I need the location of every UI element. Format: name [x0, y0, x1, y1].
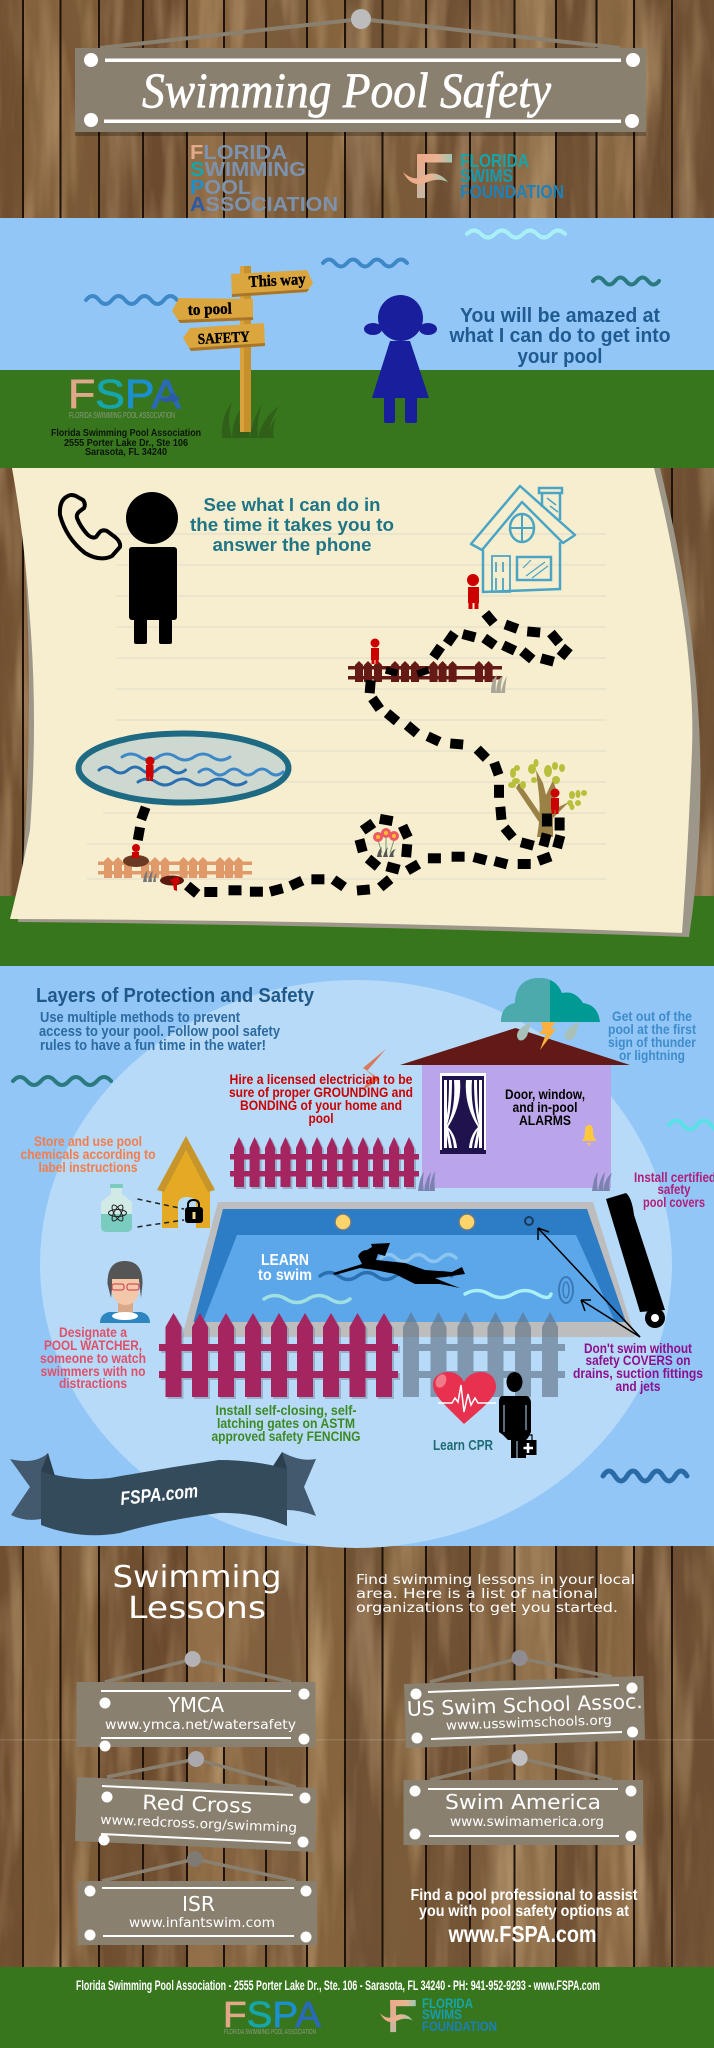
sign: US Swim School Assoc.: US Swim School Assoc. — [406, 1689, 643, 1721]
footer foundation logo: FLORIDA — [422, 1995, 473, 2011]
heading: swimming lessons — [112, 1560, 282, 1626]
logo: FSPA with address: FSPA — [68, 371, 182, 417]
text: chemicals — [20, 1134, 156, 1175]
logo: Florida Swimming Pool Association: POOL — [190, 177, 251, 199]
icon: bell — [582, 1125, 597, 1146]
drain — [525, 1217, 533, 1225]
sign: Red Cross — [75, 1751, 316, 1852]
title: Swimming Pool Safety — [142, 62, 552, 118]
sign: Swim America: Swim America — [445, 1790, 601, 1814]
footer FSPA logo: FSPA — [223, 1994, 321, 2035]
text: electrician: pool — [308, 1111, 334, 1126]
sign: to pool — [172, 298, 253, 323]
icon: electric bolt — [360, 1049, 386, 1092]
text: pool watcher: distractions — [59, 1376, 127, 1391]
icon: person on phone — [126, 492, 178, 644]
text: find a pool professional: Find a pool professional to assist — [410, 1887, 638, 1904]
text: electrician: sure of proper GROUNDING and — [229, 1085, 413, 1100]
text: learn to swim: LEARN — [261, 1252, 309, 1269]
text: lightning: or lightning — [619, 1048, 685, 1063]
footer foundation logo: SWIMS — [422, 2006, 462, 2022]
text: learn CPR: Learn CPR — [433, 1438, 493, 1454]
icon: swimmer — [333, 1243, 465, 1288]
text: lightning: sign of thunder — [608, 1035, 697, 1050]
icon: hole under fence — [123, 855, 149, 867]
text: fencing: latching gates on ASTM — [217, 1416, 355, 1431]
icon: dark fence — [348, 661, 502, 682]
logo: FSPA with address: FLORIDA SWIMMING POOL ASSOCIATION — [69, 411, 175, 420]
text: find a pool professional: you with pool safety options at — [419, 1903, 630, 1920]
logo: Florida Swimming Pool Association: ASSOCIATION — [190, 194, 338, 216]
sign: safety: SAFETY — [197, 329, 250, 348]
intro text — [39, 1010, 280, 1054]
text: pool cover warning — [573, 1341, 703, 1394]
icon: signpost — [172, 266, 313, 438]
text: find lessons — [356, 1573, 635, 1616]
text: electrician — [229, 1072, 413, 1126]
text: see what I can do: the time it takes you to — [190, 515, 394, 535]
panel: footer — [0, 1967, 714, 2048]
icon: drops and lightning — [517, 1022, 579, 1050]
logo: Florida Swims Foundation: SWIMS — [460, 166, 513, 186]
sign: US Swim School Assoc. — [404, 1650, 645, 1748]
text: find lessons: organizations to get you started. — [356, 1601, 618, 1616]
logo: Florida Swims Foundation: FLORIDA — [460, 151, 529, 171]
icon: fallen figure — [160, 876, 184, 891]
grass tufts — [418, 1171, 435, 1191]
text: pool cover warning: drains, suction fittings — [573, 1366, 703, 1381]
panel: layers of protection — [0, 966, 714, 1546]
text: amazed: You will be amazed at — [460, 305, 660, 327]
text: lightning: pool at the first — [608, 1022, 696, 1037]
intro text: Use multiple methods to prevent — [40, 1010, 240, 1026]
banner — [10, 1452, 316, 1535]
address: Sarasota, FL 34240 — [85, 447, 167, 458]
text: see what I can do: See what I can do in — [204, 495, 380, 515]
text: pool watcher — [40, 1325, 146, 1391]
text: alarms: ALARMS — [519, 1113, 571, 1128]
text: learn to swim: to swim — [258, 1267, 312, 1284]
green band below wood — [0, 896, 714, 966]
heading: swimming lessons: Lessons — [128, 1591, 266, 1626]
sign: safety — [183, 323, 265, 351]
icon: locked shed — [157, 1136, 215, 1228]
waves: section — [13, 1077, 714, 1481]
intro text: rules to have a fun time in the water! — [40, 1038, 266, 1054]
icon: light fence — [98, 857, 252, 878]
text: pool watcher: POOL WATCHER, — [44, 1338, 142, 1353]
text: alarms — [505, 1087, 585, 1128]
address: 2555 Porter Lake Dr., Ste 106 — [64, 438, 188, 449]
text: find lessons: area. Here is a list of national — [356, 1587, 598, 1602]
text: amazed: what I can do to get into — [449, 325, 670, 347]
banner text: FSPA.com — [119, 1481, 199, 1510]
text: learn to swim — [258, 1252, 312, 1284]
icon: flowers — [373, 828, 399, 857]
sign: YMCA: www.ymca.net/watersafety — [105, 1718, 296, 1733]
text: pool cover warning: safety COVERS on — [586, 1353, 690, 1368]
sign: ISR — [78, 1851, 317, 1945]
icon: padlock — [185, 1200, 203, 1223]
text: alarms: and in-pool — [512, 1100, 578, 1115]
intro text: access to your pool. Follow pool safety — [39, 1024, 280, 1040]
address — [51, 428, 201, 458]
sign: YMCA: YMCA — [167, 1693, 224, 1717]
text: electrician: BONDING of your home and — [240, 1098, 402, 1113]
icon: gray grass — [491, 675, 507, 693]
icon: pool cover roll — [606, 1193, 665, 1328]
icon: front fence — [159, 1313, 400, 1399]
text: alarms: Door, window, — [505, 1087, 585, 1102]
waves: sky — [86, 230, 659, 304]
text: see what I can do — [190, 495, 394, 555]
logo: Florida Swimming Pool Association: FLORIDA — [190, 142, 287, 164]
text: find a pool professional — [410, 1887, 638, 1947]
arrows to drains — [538, 1228, 640, 1337]
sign: Red Cross: www.redcross.org/swimming — [100, 1813, 297, 1836]
panel: house — [400, 1022, 630, 1191]
icon: storm cloud — [501, 978, 600, 1022]
icon: small gray grass — [143, 870, 157, 882]
text: chemicals: Store and use pool — [34, 1134, 142, 1149]
sign: this way: This way — [248, 271, 306, 291]
text: pool covers — [634, 1170, 714, 1210]
sign: to pool: to pool — [188, 300, 233, 319]
icon: gray gate fence — [403, 1312, 565, 1397]
text: lightning: Get out of the — [612, 1009, 692, 1024]
path: dashed route — [133, 610, 573, 898]
text: pool cover warning: and jets — [616, 1379, 660, 1394]
text: find lessons: Find swimming lessons in your local — [356, 1573, 635, 1588]
footer foundation logo: FOUNDATION — [422, 2018, 497, 2034]
website: www.FSPA.com — [448, 1921, 596, 1947]
text: electrician: Hire a licensed electrician to be — [230, 1072, 413, 1087]
pool waves — [264, 1254, 551, 1302]
logo: Florida Swimming Pool Association: SWIMMING — [190, 159, 306, 181]
grass tuft — [222, 403, 279, 438]
address: Florida Swimming Pool Association — [51, 428, 201, 439]
icon: chemical bottle — [101, 1184, 132, 1232]
logo: FSPA with address — [51, 371, 201, 458]
ruled lines — [87, 534, 606, 879]
heading: Layers of Protection and Safety — [36, 985, 315, 1007]
text: pool covers: safety — [658, 1182, 691, 1197]
text: amazed: your pool — [518, 346, 602, 368]
text: pool cover warning: Don't swim without — [584, 1341, 692, 1356]
sign: Swim America — [404, 1750, 643, 1845]
icon: pool watcher woman — [100, 1261, 150, 1323]
logo: Florida Swimming Pool Association — [190, 142, 338, 216]
sign: ISR: www.infantswim.com — [129, 1916, 275, 1931]
icon: phone — [60, 495, 120, 558]
icon: swimming pool — [182, 1202, 635, 1337]
sign: YMCA — [76, 1651, 316, 1752]
text: chemicals: chemicals according to — [20, 1147, 156, 1162]
logo: Florida Swims Foundation: FOUNDATION — [460, 182, 564, 202]
text: pool watcher: someone to watch — [40, 1351, 146, 1366]
icon: pool pond — [78, 734, 288, 802]
sign: US Swim School Assoc.: www.usswimschools.org — [446, 1713, 612, 1734]
icon: girl — [364, 295, 437, 423]
logo: Florida Swims Foundation — [403, 151, 564, 202]
sign: this way — [231, 270, 313, 297]
icon: sketched house — [471, 486, 575, 592]
text: pool watcher: swimmers with no — [40, 1364, 146, 1379]
icons: red child figures — [132, 574, 560, 858]
text: see what I can do: answer the phone — [212, 535, 372, 555]
sign: Swim America: www.swimamerica.org — [450, 1815, 604, 1830]
first aid kit — [520, 1435, 536, 1455]
large light circle — [40, 980, 672, 1548]
icon: window — [440, 1073, 486, 1154]
text: amazed — [449, 305, 670, 368]
panel: paper — [10, 468, 700, 937]
pool lights — [335, 1214, 351, 1230]
sign: Red Cross: Red Cross — [142, 1790, 253, 1818]
text: fencing: Install self-closing, self- — [216, 1403, 356, 1418]
text: fencing: approved safety FENCING — [212, 1429, 360, 1444]
sign: ISR: ISR — [182, 1892, 215, 1916]
text: lightning — [608, 1009, 697, 1063]
footer foundation logo — [380, 1995, 497, 2034]
icon: tree — [508, 759, 587, 837]
panel: sky — [0, 218, 714, 370]
text: chemicals: label instructions — [38, 1160, 138, 1175]
title sign — [75, 9, 646, 136]
panel: grass — [0, 370, 714, 468]
heading: swimming lessons: Swimming — [112, 1560, 282, 1595]
text: fencing — [212, 1403, 360, 1444]
text: pool watcher: Designate a — [59, 1325, 127, 1340]
icon: heart — [433, 1372, 496, 1424]
icon: back fence — [230, 1137, 419, 1189]
dashed lock lines — [138, 1199, 184, 1227]
footer FSPA logo: FLORIDA SWIMMING POOL ASSOCIATION — [224, 2029, 316, 2036]
icon: medic — [499, 1372, 536, 1458]
